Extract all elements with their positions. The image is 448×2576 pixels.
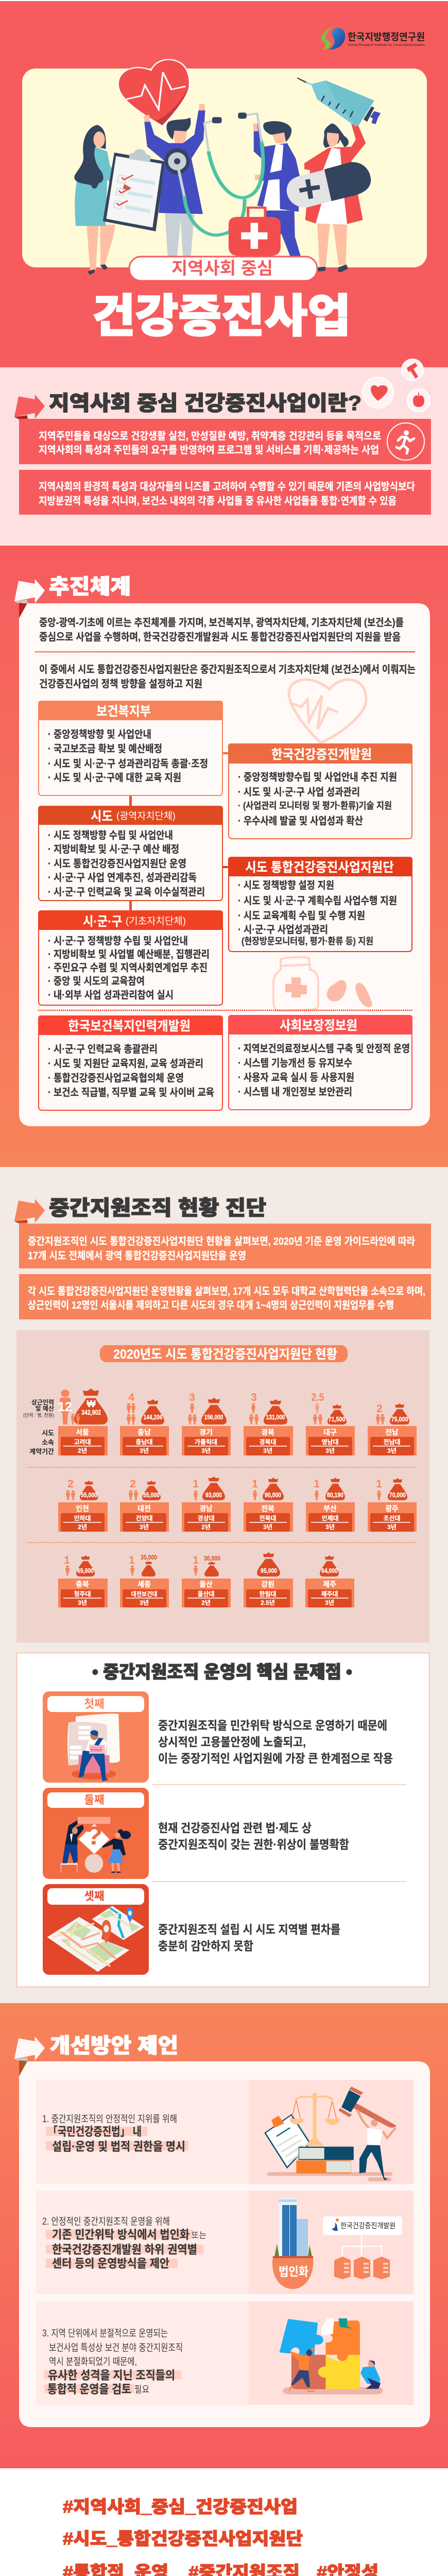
경기: 156,000 bbox=[204, 1413, 223, 1421]
인천: 55,000 bbox=[81, 1491, 97, 1499]
box: local government: · 시·군·구 정책방향 수립 및 사업안내 bbox=[48, 935, 188, 947]
대구 bbox=[311, 1392, 347, 1454]
제주: 제주대 bbox=[321, 1590, 338, 1598]
경북: 경북 bbox=[261, 1428, 274, 1436]
전남: 75,000 bbox=[391, 1415, 408, 1423]
box: KHEPI: · (사업관리 모니터링 및 평가·환류)기술 지원 bbox=[238, 801, 392, 811]
definition box: 지역사회의 특성과 주민들의 요구를 반영하여 프로그램 및 서비스를 기획·제공하는 사업 bbox=[39, 444, 379, 456]
인천: 2 bbox=[67, 1478, 74, 1490]
서울 bag and staff: ₩ bbox=[87, 1399, 96, 1409]
전북: 전북 bbox=[261, 1504, 274, 1513]
right man in blue suit bbox=[253, 121, 301, 256]
dotted divider bbox=[38, 1010, 412, 1011]
row labels: 상근인력 bbox=[31, 1399, 54, 1406]
세종: 대전보건대 bbox=[131, 1590, 158, 1598]
box: local government: 시·군·구 bbox=[83, 914, 122, 929]
panel bbox=[19, 603, 430, 1126]
cream illustration panel bbox=[22, 69, 427, 267]
경남 bbox=[193, 1477, 225, 1531]
인천: 2년 bbox=[78, 1523, 87, 1531]
problem 3 text bbox=[158, 1923, 340, 1953]
box: local government: · 중앙 및 시도의 교육참여 bbox=[48, 975, 145, 987]
울산: 1 bbox=[193, 1554, 199, 1566]
intro text bbox=[39, 617, 404, 643]
경북: 경북대 bbox=[259, 1438, 277, 1446]
광주: 광주 bbox=[385, 1504, 399, 1513]
box: local government: · 내·외부 사업 성과관리참여 실시 bbox=[48, 989, 174, 1001]
부산: 부산 bbox=[323, 1504, 337, 1513]
panel bbox=[19, 2061, 430, 2427]
text box 1 bbox=[19, 1224, 431, 1268]
광주: 70,000 bbox=[389, 1491, 406, 1499]
box: HRD institute bbox=[38, 1015, 223, 1110]
illustration: maps with pins bbox=[47, 1906, 144, 1972]
경기: 3년 bbox=[201, 1447, 211, 1454]
부산: 1 bbox=[314, 1478, 320, 1490]
illustration: puzzle team bbox=[280, 2318, 383, 2394]
panel heading: • 중간지원조직 운영의 핵심 문제점 • bbox=[92, 1663, 352, 1682]
인천 bbox=[66, 1478, 98, 1531]
heading: 개선방안 제언 bbox=[50, 2035, 178, 2057]
merit box bbox=[19, 470, 431, 515]
대전: 55,000 bbox=[143, 1491, 160, 1499]
box: local government: · 지방비확보 및 사업별 예산배분, 집행관리 bbox=[48, 948, 210, 960]
box: province support group: · 시도 및 시·군·구 계획수립 사업수행 지원 bbox=[238, 895, 397, 907]
box: province support group: 시도 통합건강증진사업지원단 bbox=[245, 860, 394, 875]
대구: 3년 bbox=[325, 1447, 335, 1454]
illustration: question diamond bbox=[61, 1817, 131, 1873]
proposal 3: 3. 지역 단위에서 분절적으로 운영되는 bbox=[42, 2328, 168, 2339]
경기: 경기 bbox=[199, 1428, 213, 1436]
box: social security info service bbox=[228, 1015, 412, 1110]
box: HRD institute: · 보건소 직급별, 직무별 교육 및 사이버 교육 bbox=[48, 1087, 214, 1098]
section: hashtags: #지역사회_중심_건강증진사업 bbox=[63, 2497, 298, 2516]
box: social security info service: · 사용자 교육 실시 등 사용지원 bbox=[238, 1072, 354, 1083]
illustration: law, gavel and books bbox=[265, 2087, 396, 2181]
대전: 2 bbox=[130, 1478, 136, 1490]
전남: 3년 bbox=[387, 1447, 397, 1454]
전남 bbox=[376, 1403, 409, 1454]
경남: 경상대 bbox=[197, 1515, 215, 1522]
proposal 3: 유사한 성격을 지닌 조직들의 bbox=[48, 2368, 175, 2382]
경북: 131,000 bbox=[266, 1413, 285, 1421]
경북: 3 bbox=[251, 1392, 257, 1403]
box: metropolitan government: 시도 bbox=[91, 809, 113, 824]
row labels: 시도 bbox=[42, 1429, 54, 1437]
problem card 2: 둘째 bbox=[84, 1793, 104, 1806]
광주: 1 bbox=[376, 1478, 382, 1490]
box: social security info service: · 지역보건의료정보시스템 구축 및 안정적 운영 bbox=[238, 1043, 410, 1055]
proposal 1: 설립·운영 및 법적 권한을 명시 bbox=[52, 2140, 185, 2153]
울산 bbox=[193, 1554, 220, 1606]
box: province support group: (현장방문모니터링, 평가·환류 등) 지원 bbox=[242, 936, 373, 946]
세종: 1 bbox=[129, 1554, 135, 1566]
illustration: worried worker bbox=[67, 1714, 120, 1781]
text box 2 bbox=[19, 1274, 431, 1319]
경북 bbox=[249, 1392, 287, 1454]
merit box: 지역사회의 환경적 특성과 대상자들의 니즈를 고려하여 수행할 수 있기 때문에 기존의 사업방식보다 bbox=[39, 481, 415, 493]
section: governance structure bbox=[0, 546, 448, 1167]
heading arrow bbox=[14, 2037, 45, 2061]
icon: heart with ECG bbox=[119, 60, 189, 125]
box: ministry: · 중앙정책방향 및 사업안내 bbox=[48, 728, 151, 740]
서울 bag and staff: 고려대 bbox=[74, 1438, 91, 1446]
전북 bbox=[252, 1478, 284, 1531]
충북: 충북 bbox=[76, 1580, 89, 1588]
울산: 30,000 bbox=[204, 1554, 220, 1562]
box: ministry: 보건복지부 bbox=[96, 704, 151, 719]
proposal 1: 「국민건강증진법」 내 bbox=[48, 2125, 142, 2138]
box: local government bbox=[38, 910, 223, 1005]
subtitle pill bbox=[129, 257, 317, 281]
대전: 대전 bbox=[137, 1504, 151, 1513]
경남: 2년 bbox=[201, 1523, 211, 1531]
problem card 3: 셋째 bbox=[84, 1890, 104, 1903]
충남: 144,206 bbox=[143, 1413, 163, 1421]
광주: 조선대 bbox=[383, 1515, 401, 1522]
right woman with syringe bbox=[304, 113, 366, 272]
제주: 64,000 bbox=[321, 1567, 338, 1574]
section: hashtags bbox=[0, 2468, 448, 2576]
heading: 추진체계 bbox=[49, 575, 131, 598]
box: ministry: · 시도 및 시·군·구 성과관리감독 총괄·조정 bbox=[48, 758, 208, 770]
icon: capsule pill bbox=[287, 162, 371, 208]
대전: 건양대 bbox=[135, 1515, 153, 1522]
title: 건강증진사업 bbox=[92, 291, 351, 342]
hero illustration: medical team bbox=[74, 60, 381, 275]
대구: 2.5 bbox=[311, 1392, 324, 1403]
충남 bbox=[127, 1392, 164, 1454]
center man in blue coat bbox=[144, 104, 205, 257]
전북: 90,000 bbox=[265, 1491, 281, 1499]
org chart: 한국건강증진개발원 bbox=[340, 2222, 395, 2230]
부산: 인제대 bbox=[321, 1514, 339, 1522]
proposal 2: 한국건강증진개발원 하위 권역별 bbox=[52, 2243, 197, 2256]
problem 1 text: 상시적인 고용불안정에 노출되고, bbox=[158, 1735, 306, 1749]
definition box bbox=[19, 419, 431, 464]
인천: 인하대 bbox=[74, 1515, 91, 1522]
강원: 한림대 bbox=[259, 1590, 277, 1598]
support org text: 건강증진사업의 정책 방향을 설정하고 지원 bbox=[39, 678, 202, 690]
logo: institute top: 한국지방행정연구원 bbox=[348, 31, 425, 43]
서울 bag and staff bbox=[58, 1388, 108, 1454]
proposal 2: 또는 bbox=[192, 2231, 206, 2240]
경기: 가톨릭대 bbox=[195, 1438, 217, 1446]
proposal 1 bbox=[36, 2080, 413, 2184]
box: province support group: · 시도 정책방향 설정 지원 bbox=[238, 879, 334, 891]
부산: 80,190 bbox=[327, 1491, 343, 1499]
problem 1 text bbox=[158, 1719, 393, 1765]
problem 2 text: 현재 건강증진사업 관련 법·제도 상 bbox=[158, 1821, 312, 1835]
card row 2 backgrounds bbox=[58, 1502, 417, 1532]
경남: 경남 bbox=[199, 1504, 213, 1513]
icon: stethoscope tubes bbox=[178, 113, 263, 235]
heading: 중간지원조직 현황 진단 bbox=[49, 1197, 266, 1219]
intro text: 중앙-광역-기초에 이르는 추진체계를 가지며, 보건복지부, 광역자치단체, 기초자치단체 (보건소)를 bbox=[39, 617, 404, 629]
인천: 인천 bbox=[76, 1504, 89, 1513]
text box 2: 상근인력이 12명인 서울시를 제외하고 다른 시도의 경우 대개 1~4명의 상근인력이 지원업무를 수행 bbox=[28, 1299, 394, 1311]
logo: institute top: Korea Research Institute for Local Administration bbox=[348, 43, 425, 47]
강원: 강원 bbox=[261, 1580, 274, 1588]
problem 1 text: 이는 중장기적인 사업지원에 가장 큰 한계점으로 작용 bbox=[158, 1752, 393, 1765]
box: HRD institute: · 시도 및 지원단 교육지원, 교육 성과관리 bbox=[48, 1058, 203, 1070]
problem card 1 bbox=[43, 1691, 149, 1783]
proposal 3: 통합적 운영을 검토 bbox=[47, 2382, 131, 2396]
heading arrow bbox=[14, 1199, 45, 1226]
problem 2 text bbox=[158, 1821, 349, 1851]
illustration: worried worker: FIRED bbox=[91, 1749, 101, 1751]
proposal 3: 필요 bbox=[134, 2384, 149, 2395]
section: what is the program bbox=[0, 359, 448, 546]
panel: core problems bbox=[16, 1653, 429, 1987]
세종: 세종 bbox=[137, 1580, 151, 1588]
proposal 2: 2. 안정적인 중간지원조직 운영을 위해 bbox=[42, 2216, 170, 2227]
icon: syringe bbox=[297, 77, 381, 127]
광주: 3년 bbox=[387, 1523, 397, 1531]
경북: 3년 bbox=[263, 1447, 272, 1454]
logo: institute top bbox=[321, 26, 425, 49]
충북 bbox=[64, 1554, 95, 1606]
충북: 3년 bbox=[78, 1599, 87, 1606]
대구: 영남대 bbox=[321, 1438, 339, 1446]
definition box: 지역주민들을 대상으로 건강생활 실천, 만성질환 예방, 취약계층 건강관리 등을 목적으로 bbox=[39, 430, 381, 442]
illustration: question diamond: ? bbox=[85, 1821, 103, 1850]
box: province support group bbox=[228, 857, 412, 952]
전북: 1 bbox=[252, 1478, 258, 1490]
box: province support group: · 시·군·구 사업성과관리 bbox=[238, 924, 328, 936]
box: ministry: · 국고보조금 확보 및 예산배정 bbox=[48, 743, 162, 755]
세종 bbox=[129, 1553, 158, 1606]
section: improvement proposals bbox=[0, 2003, 448, 2468]
서울 bag and staff: 342,902 bbox=[81, 1408, 101, 1416]
proposal 3: 보건사업 특성상 보건 분야 중간지원조직 bbox=[49, 2342, 183, 2353]
box: metropolitan government: · 지방비확보 및 시·군·구 예산 배정 bbox=[48, 843, 179, 855]
부산: 3년 bbox=[325, 1523, 335, 1531]
heading: 지역사회 중심 건강증진사업이란? bbox=[49, 392, 361, 415]
decorative circle icon: hammer bbox=[402, 359, 423, 381]
box: social security info service: 사회보장정보원 bbox=[280, 1019, 357, 1033]
울산: 울산 bbox=[199, 1580, 213, 1588]
icon: first aid kit bbox=[229, 208, 281, 256]
icon: medicine watermark bbox=[273, 957, 372, 1011]
proposal 2 bbox=[36, 2191, 413, 2294]
org chart bbox=[323, 2216, 402, 2279]
proposal 1: 1. 중간지원조직의 안정적인 지위를 위해 bbox=[42, 2113, 177, 2125]
chart panel: 2020 status bbox=[16, 1330, 429, 1642]
box: metropolitan government: · 시·군·구 인력교육 및 교육 이수실적관리 bbox=[48, 886, 205, 898]
충남: 충남 bbox=[137, 1428, 151, 1436]
card row 3 backgrounds bbox=[58, 1579, 354, 1607]
서울 bag and staff: 서울 bbox=[76, 1428, 89, 1436]
row labels: 및 예산 bbox=[36, 1405, 54, 1412]
connectors bbox=[129, 752, 228, 910]
problem 3 text: 중간지원조직 설립 시 시도 지역별 편차를 bbox=[158, 1923, 340, 1936]
box: metropolitan government bbox=[38, 806, 223, 901]
row labels: 계약기간 bbox=[29, 1448, 54, 1455]
row labels: (단위 : 명, 천원) bbox=[23, 1413, 54, 1418]
대구: 대구 bbox=[323, 1428, 337, 1436]
광주 bbox=[376, 1478, 407, 1531]
box: metropolitan government: (광역자치단체) bbox=[116, 810, 176, 822]
icon: heart watermark bbox=[289, 680, 366, 743]
제주: 3년 bbox=[325, 1599, 334, 1606]
problem card 3 bbox=[43, 1884, 149, 1975]
subtitle pill: 지역사회 중심 bbox=[171, 259, 273, 278]
box: metropolitan government: · 시도 통합건강증진사업지원단 운영 bbox=[48, 858, 186, 870]
section: diagnosis of intermediary org bbox=[0, 1167, 448, 2003]
box: ministry bbox=[38, 701, 223, 795]
box: metropolitan government: · 시·군·구 사업 연계추진, 성과관리감독 bbox=[48, 872, 197, 884]
경남: 1 bbox=[193, 1478, 199, 1490]
충남: 충남대 bbox=[135, 1438, 153, 1446]
decorative circle icon: heart bbox=[363, 377, 393, 408]
충북: 1 bbox=[64, 1554, 70, 1566]
merit box: 지방분권적 특성을 지니며, 보건소 내외의 각종 사업들 중 유사한 사업들을 통합·연계할 수 있음 bbox=[39, 495, 397, 507]
box: KHEPI: 한국건강증진개발원 bbox=[271, 748, 372, 762]
box: local government: (기초자치단체) bbox=[126, 916, 186, 927]
충남: 4 bbox=[128, 1392, 134, 1403]
충북: 65,000 bbox=[77, 1567, 94, 1574]
대전: 3년 bbox=[140, 1523, 149, 1531]
box: social security info service: · 시스템 내 개인정보 보안관리 bbox=[238, 1086, 352, 1098]
row labels bbox=[23, 1399, 54, 1455]
세종: 35,000 bbox=[141, 1553, 157, 1561]
box: HRD institute: · 시·군·구 인력교육 총괄관리 bbox=[48, 1043, 158, 1055]
proposal 3: 역시 분절화되었기 때문에, bbox=[49, 2356, 137, 2367]
경남: 93,000 bbox=[205, 1491, 222, 1499]
hero section background bbox=[0, 1, 448, 367]
box: social security info service: · 시스템 기능개선 등 유지보수 bbox=[238, 1057, 352, 1069]
box: local government: · 주민요구 수렴 및 지역사회연계업무 추진 bbox=[48, 962, 208, 974]
제주: 제주 bbox=[323, 1580, 336, 1588]
제주 bbox=[320, 1555, 339, 1606]
problem 3 text: 충분히 감안하지 못함 bbox=[158, 1939, 253, 1953]
fold bbox=[19, 2060, 27, 2076]
problem 1 text: 중간지원조직을 민간위탁 방식으로 운영하기 때문에 bbox=[158, 1719, 387, 1732]
icon: runner bbox=[387, 423, 424, 460]
전남: 전남대 bbox=[383, 1438, 401, 1446]
전남: 전남 bbox=[385, 1428, 399, 1436]
box: metropolitan government: · 시도 정책방향 수립 및 사업안내 bbox=[48, 829, 173, 841]
충남: 3년 bbox=[140, 1447, 149, 1454]
경기: 3 bbox=[189, 1392, 195, 1403]
전북: 3년 bbox=[263, 1523, 272, 1531]
proposal 2: 센터 등의 운영방식을 제안 bbox=[52, 2257, 169, 2270]
support org text bbox=[39, 664, 416, 690]
problem 2 text: 중간지원조직이 갖는 권한·위상이 불명확함 bbox=[158, 1838, 349, 1851]
illustration: incorporated building bbox=[272, 2198, 313, 2289]
세종: 3년 bbox=[140, 1599, 149, 1606]
대전 bbox=[129, 1478, 161, 1531]
proposal 2: 기존 민간위탁 방식에서 법인화 bbox=[52, 2228, 189, 2241]
heading arrow bbox=[14, 579, 45, 603]
box: HRD institute: · 통합건강증진사업교육협의체 운영 bbox=[48, 1072, 184, 1084]
section: hashtags: #시도_통합건강증진사업지원단 bbox=[63, 2529, 303, 2548]
fold bbox=[19, 603, 27, 618]
box: HRD institute: 한국보건복지인력개발원 bbox=[68, 1019, 191, 1033]
text box 1: 중간지원조직인 시도 통합건강증진사업지원단 현황을 살펴보면, 2020년 기준 운영 가이드라인에 따라 bbox=[28, 1235, 415, 1247]
충북: 청주대 bbox=[74, 1590, 91, 1598]
강원: 2.5년 bbox=[261, 1599, 275, 1606]
box: KHEPI: · 시도 및 시·군·구 사업 성과관리 bbox=[238, 786, 360, 798]
problem card 2 bbox=[43, 1788, 149, 1879]
chart title pill: 2020년도 시도 통합건강증진사업지원단 현황 bbox=[113, 1347, 337, 1362]
row labels: 소속 bbox=[42, 1438, 54, 1446]
problem card 1: 첫째 bbox=[84, 1698, 104, 1710]
text box 1: 17개 시도 전체에서 광역 통합건강증진사업지원단을 운영 bbox=[28, 1250, 246, 1262]
전남: 2 bbox=[376, 1403, 383, 1415]
서울 bag and staff: 12 bbox=[58, 1400, 72, 1414]
강원: 95,000 bbox=[261, 1567, 277, 1574]
box: KHEPI bbox=[228, 743, 412, 839]
box: KHEPI: · 우수사례 발굴 및 사업성과 확산 bbox=[238, 815, 363, 827]
부산 bbox=[314, 1478, 345, 1531]
울산: 2년 bbox=[201, 1599, 211, 1606]
card row 1 backgrounds bbox=[58, 1426, 417, 1455]
전북: 전북대 bbox=[259, 1515, 277, 1522]
left woman with clipboard bbox=[74, 125, 165, 275]
intro text: 중심으로 사업을 수행하며, 한국건강증진개발원과 시도 통합건강증진사업지원단의 지원을 받음 bbox=[39, 631, 401, 643]
서울 bag and staff: 2년 bbox=[78, 1447, 87, 1454]
경기 bbox=[188, 1392, 227, 1454]
proposal 3 bbox=[36, 2301, 413, 2405]
대구: 71,500 bbox=[329, 1415, 345, 1423]
box: ministry: · 시도 및 시·군·구에 대한 교육 지원 bbox=[48, 772, 181, 784]
울산: 울산대 bbox=[197, 1590, 215, 1598]
illustration: incorporated building: 법인화 bbox=[279, 2265, 308, 2278]
decorative circle icon: apple bbox=[407, 389, 430, 412]
box: province support group: · 시도 교육계획 수립 및 수행 지원 bbox=[238, 910, 365, 922]
강원 bbox=[257, 1552, 280, 1606]
box: KHEPI: · 중앙정책방향수립 및 사업안내 추진 지원 bbox=[238, 771, 397, 783]
heading arrow bbox=[14, 395, 45, 421]
